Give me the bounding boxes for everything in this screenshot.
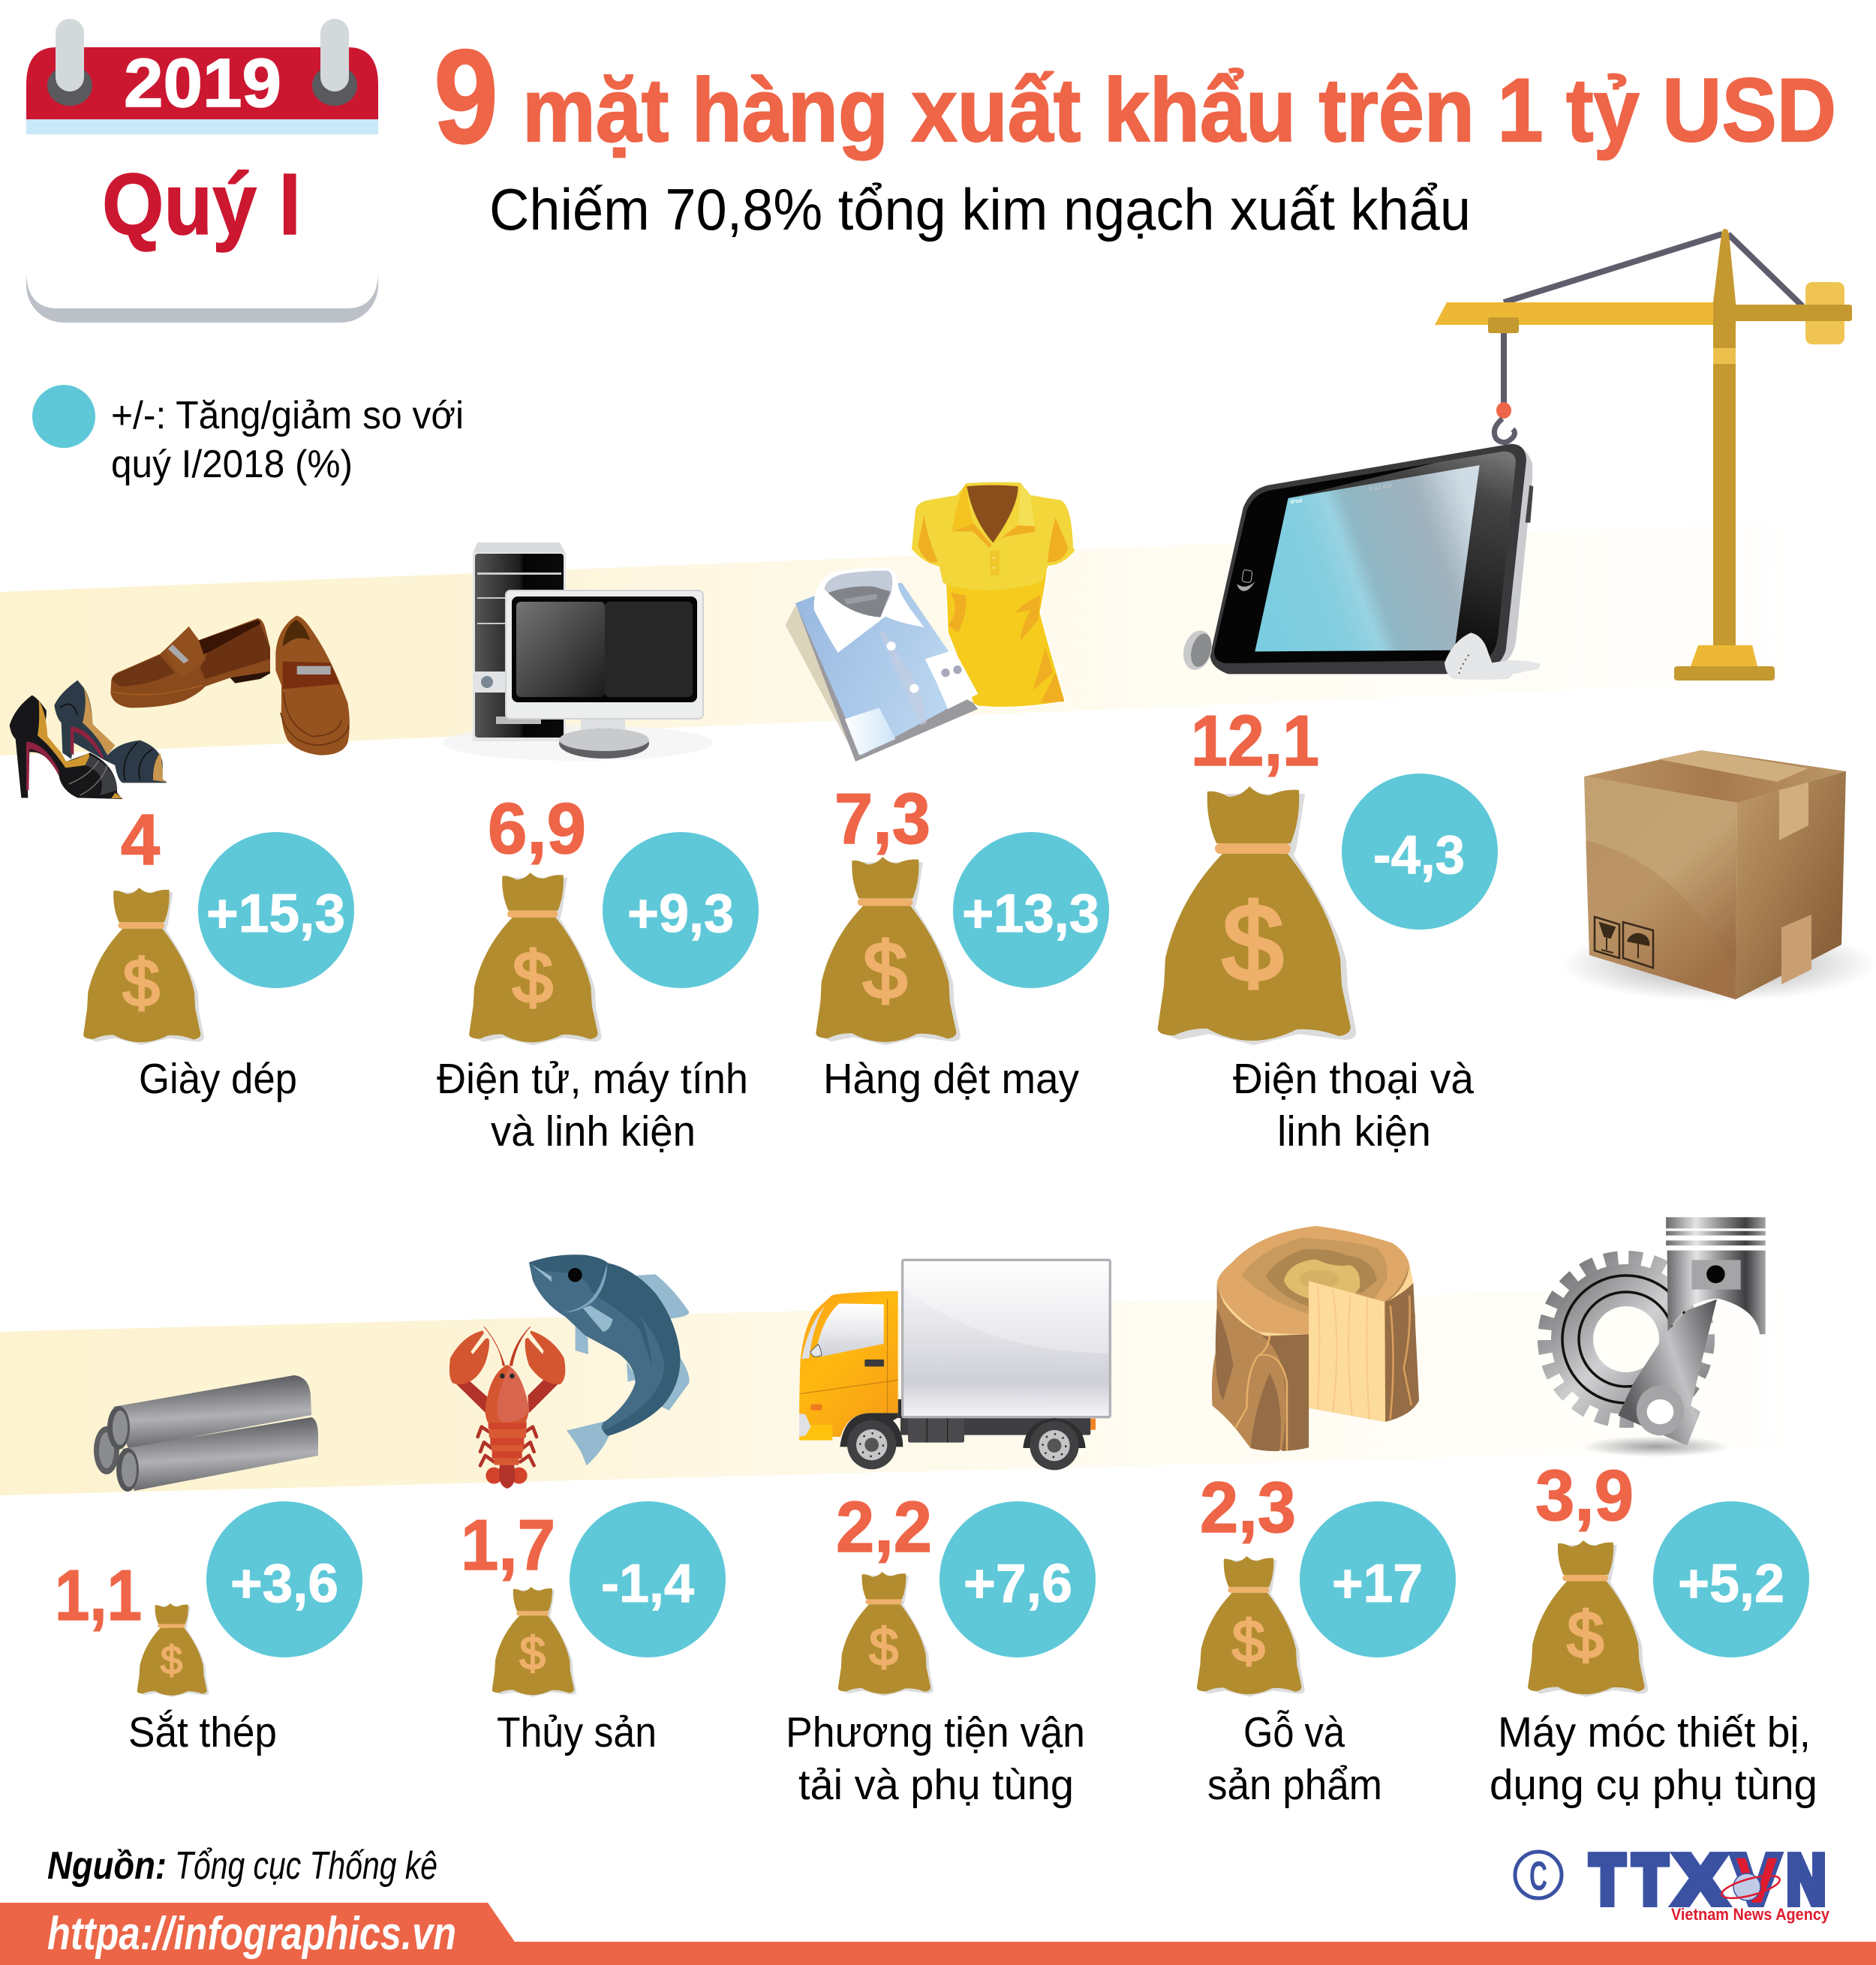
icon: money bag: $ <box>519 1628 546 1680</box>
label: tải và phụ tùng <box>798 1761 1074 1809</box>
value: 4: 4 <box>121 800 160 880</box>
value: 7,3: 7,3 <box>834 779 930 859</box>
change: +3,6: +3,6 <box>230 1554 338 1614</box>
item: Sắt thép <box>55 1501 362 1756</box>
item: Thủy sản <box>461 1501 726 1756</box>
item: Giày dép <box>83 800 354 1103</box>
change: +7,6 <box>940 1501 1096 1657</box>
icon: money bag: $ <box>869 1618 898 1676</box>
icon: lobster <box>449 1327 565 1489</box>
icon: money bag <box>137 1603 209 1697</box>
logo: TTXVN: X <box>1675 1840 1726 1918</box>
change: +13,3 <box>953 832 1109 988</box>
calendar: 2019 Quý I: 2019 <box>124 45 281 122</box>
label: và linh kiện <box>491 1107 696 1155</box>
logo: TTXVN: V <box>1733 1840 1779 1918</box>
icon: truck <box>799 1260 1110 1470</box>
label <box>786 1708 1085 1809</box>
footer bar: httpa://infographics.vn <box>47 1908 456 1960</box>
icon: money bag: $ <box>513 936 553 1018</box>
source: Nguồn: <box>47 1844 167 1888</box>
logo: TTXVN <box>1515 1840 1830 1924</box>
icon: money bag: $ <box>863 927 907 1016</box>
subtitle: Chiếm 70,8% tổng kim ngạch xuất khẩu <box>489 176 1471 242</box>
title: 9 <box>434 22 498 171</box>
item: Điện thoại và linh kiện <box>1158 701 1498 1155</box>
value: 1,1: 1,1 <box>55 1555 142 1636</box>
footer bar <box>0 1903 1876 1965</box>
item: Phương tiện vận tải và phụ tùng <box>786 1487 1096 1809</box>
legend: +/-: Tăng/giảm so với <box>111 394 464 437</box>
value: 2,2: 2,2 <box>836 1487 932 1567</box>
label <box>1207 1708 1382 1809</box>
icon: steel pipes <box>94 1375 318 1492</box>
icon: fish <box>529 1254 690 1465</box>
icon: money bag: $ <box>161 1639 182 1683</box>
icon: loafer side view <box>110 618 270 708</box>
source: Tổng cục Thống kê <box>175 1844 437 1888</box>
icon: tablet and earphones: iPod <box>1290 497 1303 506</box>
label: Thủy sản <box>497 1708 657 1756</box>
item: Hàng dệt may <box>816 779 1109 1103</box>
value: 1,7: 1,7 <box>461 1505 555 1585</box>
icon: yellow polo shirt <box>912 482 1075 708</box>
icon: money bag <box>1197 1556 1305 1696</box>
label: Điện tử, máy tính <box>437 1055 748 1103</box>
change: +5,2: +5,2 <box>1678 1554 1784 1614</box>
label: dụng cụ phụ tùng <box>1490 1761 1817 1809</box>
icon: tablet and earphones: 9:42 AM <box>1369 482 1393 492</box>
value: 2,3: 2,3 <box>1200 1468 1296 1548</box>
calendar: 2019 Quý I: Quý I <box>102 155 301 253</box>
icon: shirts <box>786 482 1075 762</box>
label: Giày dép <box>139 1055 297 1103</box>
label: Phương tiện vận <box>786 1708 1085 1756</box>
change: -1,4: -1,4 <box>601 1554 694 1614</box>
item: Máy móc thiết bị, dụng cụ phụ tùng <box>1490 1456 1817 1809</box>
change: +13,3: +13,3 <box>962 884 1099 944</box>
value: 12,1: 12,1 <box>1191 701 1319 781</box>
icon: cardboard box <box>1561 750 1876 1002</box>
change: +5,2 <box>1653 1501 1809 1657</box>
icon: money bag <box>1158 786 1356 1045</box>
icon: black high heel <box>10 696 122 799</box>
icon: money bag <box>492 1587 576 1697</box>
icon: money bag: $ <box>1567 1598 1604 1672</box>
logo: TTXVN: N <box>1787 1840 1826 1918</box>
icon: gear and piston <box>1545 1217 1766 1457</box>
logo: TTXVN: C <box>1529 1852 1547 1899</box>
label: Điện thoại và <box>1233 1055 1474 1103</box>
icon: money bag: $ <box>1222 882 1283 1004</box>
logo: TTXVN: Vietnam News Agency <box>1671 1905 1830 1924</box>
legend: quý I/2018 (%) <box>111 443 353 486</box>
change: +3,6 <box>206 1501 362 1657</box>
change: +17 <box>1300 1501 1456 1657</box>
label: Máy móc thiết bị, <box>1498 1708 1811 1756</box>
icon: money bag: $ <box>1232 1608 1265 1675</box>
label <box>437 1055 748 1155</box>
icon: money bag <box>816 857 961 1045</box>
change: -1,4 <box>570 1501 726 1657</box>
label <box>1490 1708 1817 1809</box>
item: Gỗ và sản phẩm <box>1197 1468 1456 1809</box>
label <box>1233 1055 1474 1155</box>
label: linh kiện <box>1277 1107 1431 1155</box>
change: -4,3: -4,3 <box>1373 825 1465 885</box>
icon: tablet and earphones <box>1179 444 1541 680</box>
icon: wood stump <box>1212 1226 1419 1451</box>
lower yellow band <box>0 1283 1876 1495</box>
calendar: 2019 Quý I <box>26 19 378 323</box>
title <box>434 22 1836 171</box>
icon: money bag <box>1528 1540 1648 1697</box>
logo: TTXVN: V <box>1736 1845 1778 1917</box>
label: Gỗ và <box>1243 1708 1345 1756</box>
icon: crane <box>1435 229 1852 681</box>
logo: TTXVN: T <box>1633 1840 1667 1918</box>
icon: blue folded shirt <box>786 567 978 762</box>
icon: money bag <box>469 873 602 1045</box>
value: 3,9: 3,9 <box>1535 1456 1634 1536</box>
value: 6,9: 6,9 <box>488 789 586 869</box>
icon: money bag <box>83 888 204 1045</box>
change: -4,3 <box>1342 774 1498 930</box>
source <box>47 1844 437 1888</box>
label: Sắt thép <box>128 1708 277 1756</box>
icon: money bag: $ <box>123 945 160 1020</box>
logo: TTXVN: T <box>1590 1840 1625 1918</box>
change: +9,3 <box>603 832 759 988</box>
icon: loafer top view <box>275 616 350 756</box>
icon: shoes <box>10 616 350 799</box>
change: +17: +17 <box>1332 1554 1423 1614</box>
icon: money bag <box>838 1572 933 1696</box>
icon: blue high heel <box>54 681 167 783</box>
label: Hàng dệt may <box>823 1055 1079 1103</box>
icon: desktop computer <box>443 542 713 761</box>
change: +15,3: +15,3 <box>206 884 345 944</box>
change: +9,3: +9,3 <box>627 884 734 944</box>
change: +15,3 <box>198 832 354 988</box>
upper yellow band <box>0 518 1876 756</box>
item: Điện tử, máy tính và linh kiện <box>437 789 759 1155</box>
change: +7,6: +7,6 <box>964 1554 1072 1614</box>
legend <box>32 385 464 486</box>
label: sản phẩm <box>1207 1761 1382 1809</box>
